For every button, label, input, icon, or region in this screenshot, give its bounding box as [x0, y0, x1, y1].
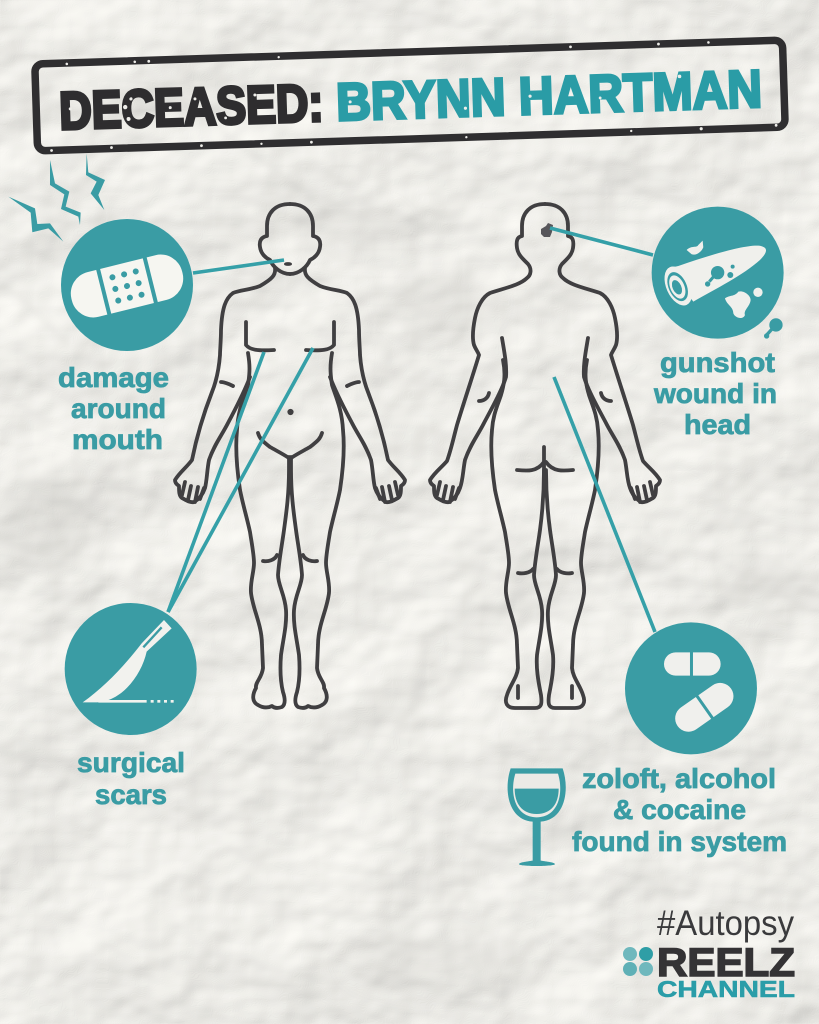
- label: gunshot wound in head: head: [684, 409, 751, 440]
- wound marker on head: [541, 223, 553, 237]
- label: surgical scars: [77, 747, 185, 810]
- label: gunshot wound in head: gunshot: [660, 347, 775, 378]
- hashtag: #Autopsy: [657, 904, 794, 943]
- icon: scalpel: [65, 603, 197, 735]
- icon: pain lightning bolts: [8, 153, 105, 242]
- body diagram: back: [430, 204, 660, 708]
- logo dots: [623, 947, 653, 976]
- label: zoloft, alcohol and cocaine found in system: zoloft, alcohol: [582, 763, 776, 794]
- title banner: [35, 39, 785, 152]
- label: zoloft, alcohol and cocaine found in system: found in system: [572, 826, 787, 857]
- label: zoloft, alcohol and cocaine found in system: & cocaine: [613, 794, 746, 825]
- logo: REELZ Channel: [623, 941, 795, 1002]
- body diagram: front: [175, 204, 405, 708]
- distressed specks: [47, 39, 778, 152]
- title text: name: BRYNN HARTMAN: [335, 60, 763, 132]
- icon: wine glass: [508, 768, 566, 866]
- label: zoloft, alcohol and cocaine found in system: [572, 763, 787, 857]
- label: surgical scars: scars: [95, 779, 167, 810]
- icon: bandage: [61, 219, 193, 351]
- pointer lines: [168, 228, 655, 632]
- label: gunshot wound in head: wound in: [653, 378, 777, 409]
- label: damage around mouth: around: [71, 393, 166, 424]
- label: damage around mouth: [58, 362, 169, 455]
- logo wordmark: REELZ: [657, 941, 795, 985]
- icon: bullet: [652, 207, 784, 339]
- banner frame: [35, 40, 785, 151]
- label: damage around mouth: mouth: [72, 424, 163, 455]
- icon: pills: [625, 622, 757, 754]
- label: gunshot wound in head: [653, 347, 777, 440]
- logo channel: CHANNEL: [657, 976, 795, 1002]
- label: surgical scars: surgical: [77, 747, 185, 778]
- title text: deceased: DECEASED:: [58, 74, 324, 141]
- label: damage around mouth: damage: [58, 362, 169, 393]
